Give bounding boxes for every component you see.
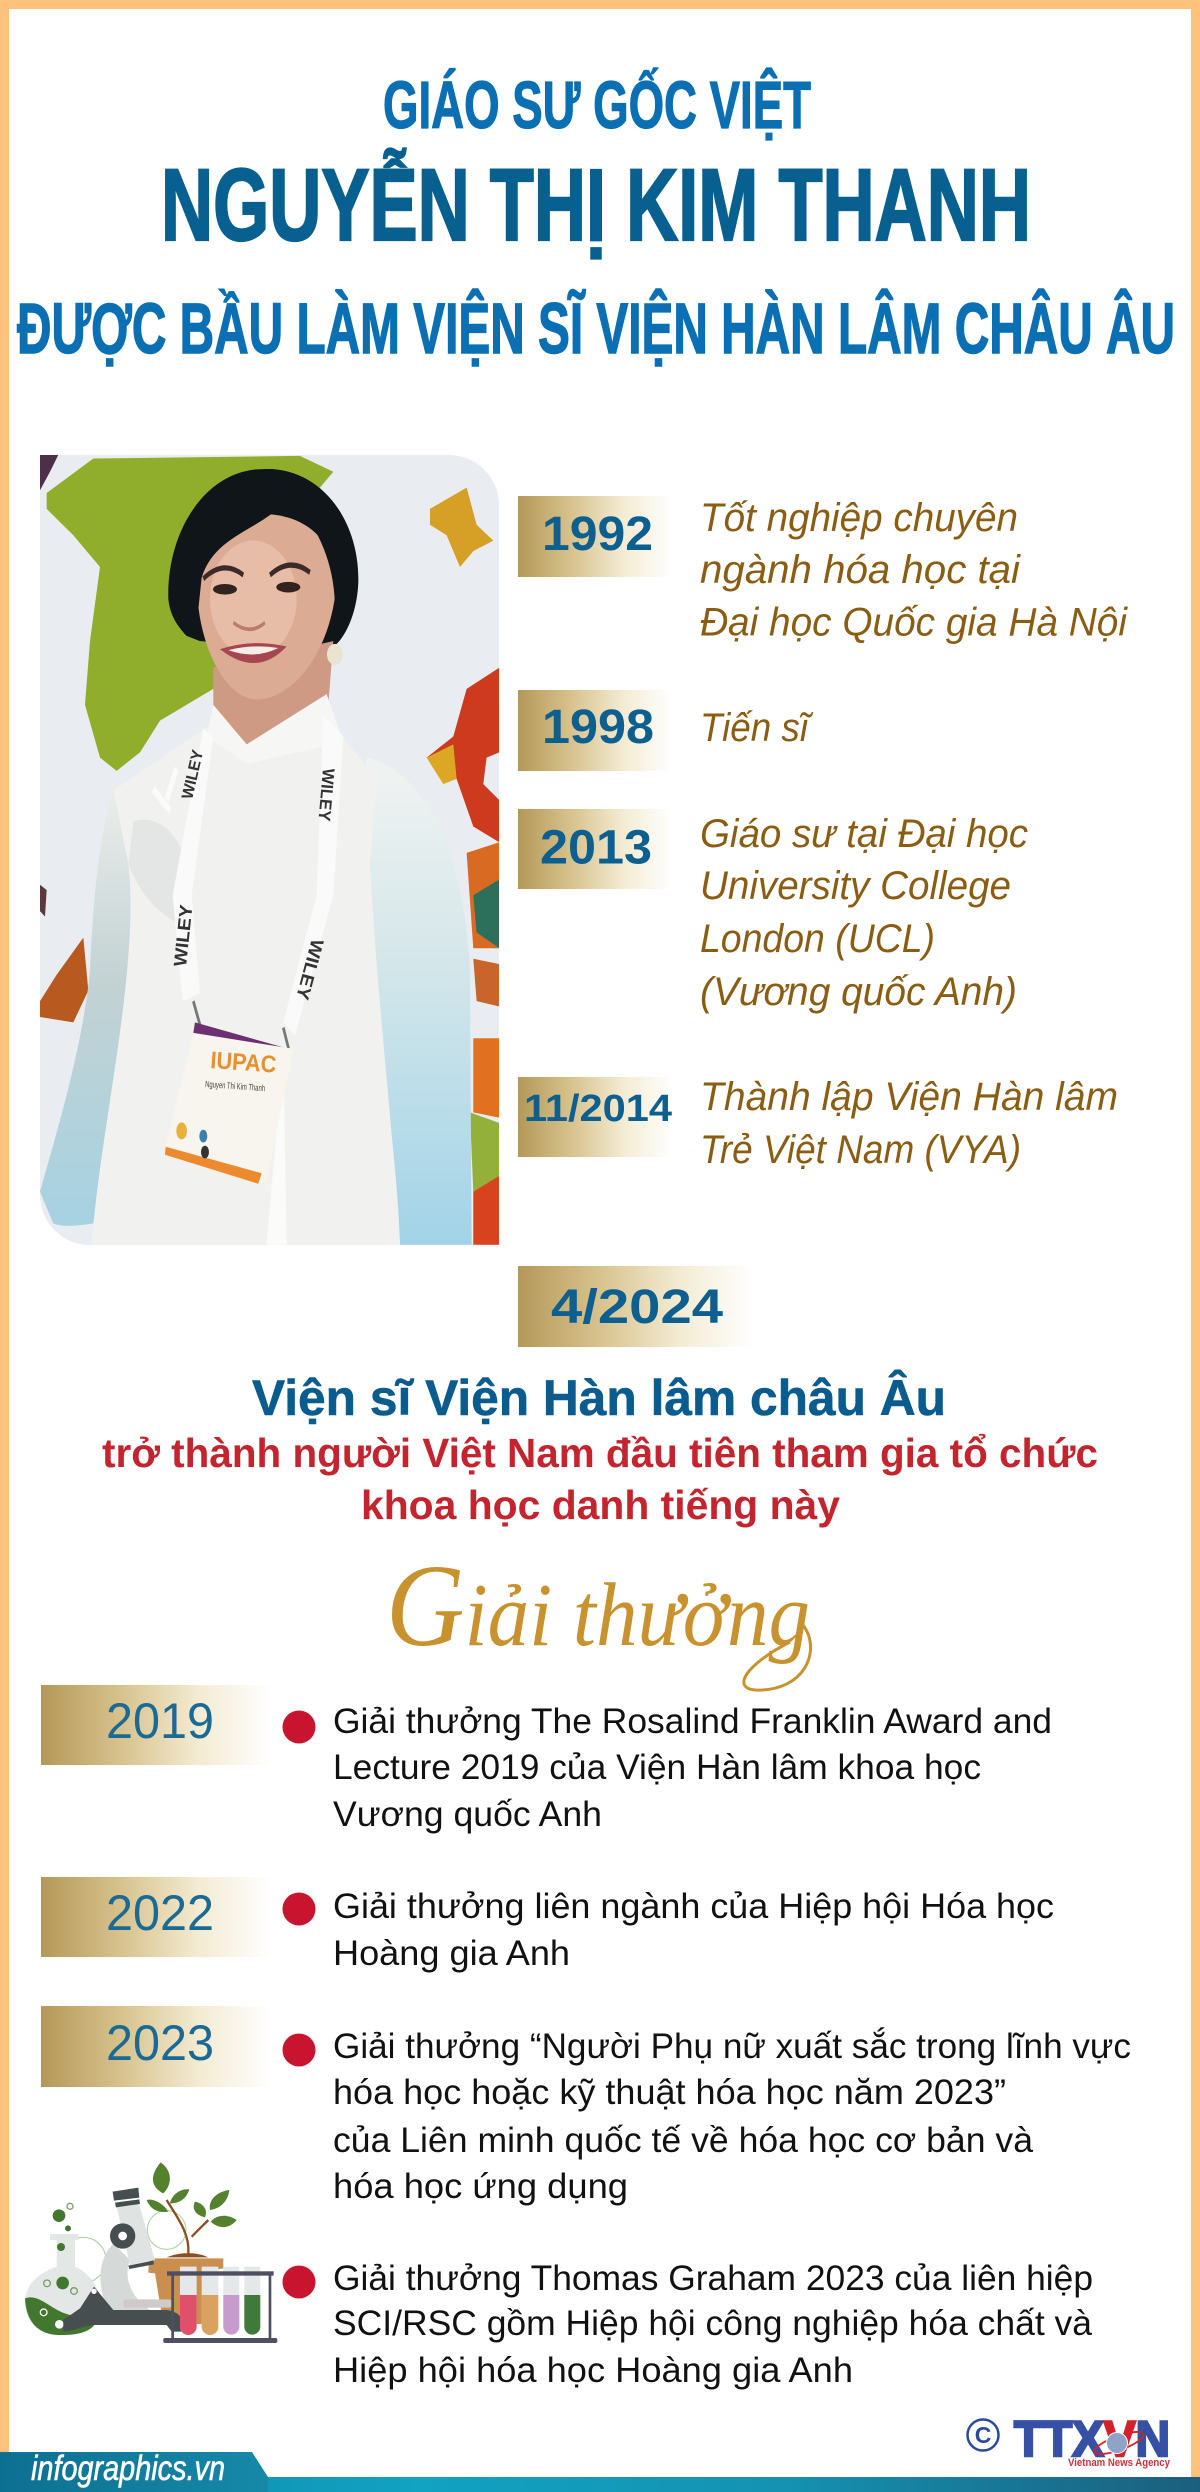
award 2023: 2023 [106,2015,214,2071]
award 2022: Giải thưởng liên ngành của Hiệp hội Hóa học [333,1887,1054,1926]
milestone 1992 text: ngành hóa học tại [700,548,1021,592]
award 2019: 2019 [106,1693,214,1749]
tag 1992: 1992 [542,508,653,561]
lanyard text: WILEY [179,748,207,801]
wordmark: TTXVN [1014,2411,1170,2467]
petri dish behind [147,2211,186,2249]
badge [165,1022,293,1184]
red statement [102,1430,1098,1528]
award 2023: Giải thưởng “Người Phụ nữ xuất sắc trong lĩnh vực [333,2027,1131,2066]
copyright symbol: C [975,2422,991,2448]
tag 1992 [518,496,672,577]
tag 2013 [518,809,672,889]
lanyard text: WILEY [292,937,327,1002]
microscope [63,2188,185,2332]
timeline: career milestones [518,496,1128,1172]
milestone 1992 text: Đại học Quốc gia Hà Nội [700,600,1128,644]
collar [209,694,340,758]
badge text [206,1052,276,1092]
award 2023 [41,2006,1131,2206]
portrait photo [40,455,499,1245]
award Thomas Graham 2023: SCI/RSC gồm Hiệp hội công nghiệp hóa chất và [333,2304,1093,2343]
badge text: IUPAC [210,1047,277,1079]
face [197,514,336,699]
torso [94,799,400,1244]
award Thomas Graham 2023: Hiệp hội hóa học Hoàng gia Anh [333,2351,853,2390]
agency name: Vietnam News Agency [1068,2457,1171,2469]
right sleeve [371,874,472,1245]
milestone 1992 text [700,496,1128,644]
lanyard text: WILEY [170,904,196,967]
award Thomas Graham 2023 [282,2259,1093,2390]
award Thomas Graham 2023: Giải thưởng Thomas Graham 2023 của liên hiệp [333,2259,1093,2298]
award 2023: hóa học hoặc kỹ thuật hóa học năm 2023” [333,2073,1006,2112]
award 2019: Lecture 2019 của Viện Hàn lâm khoa học [333,1748,981,1787]
tag 2013: 2013 [540,822,652,874]
eyes, nose and smile [203,565,310,663]
neck [213,641,333,752]
award 2019: Vương quốc Anh [333,1795,602,1834]
tag 1998 [518,690,672,771]
illustration: laboratory microscope, flask, plant and test tubes [25,2162,277,2343]
plant and pot [147,2162,237,2324]
test tubes and rack [163,2267,277,2343]
tag 1998: 1998 [542,701,654,754]
badge text: Nguyen Thi Kim Thanh [205,1079,265,1093]
tag 11/2014 [518,1077,672,1157]
milestone 1992 text: Tốt nghiệp chuyên [700,496,1018,540]
milestone 2013 text: London (UCL) [700,917,935,961]
copyright symbol [968,2420,998,2450]
milestone 2013 text: University College [700,864,1011,908]
award 2022: 2022 [106,1885,214,1941]
back hair [168,469,358,649]
milestone 11/2014 text: Thành lập Viện Hàn lâm [700,1075,1118,1119]
title [17,67,1175,369]
award 2023: hóa học ứng dụng [333,2167,628,2206]
milestone 11/2014 text [700,1075,1118,1172]
front hair [196,469,336,608]
flask [25,2203,106,2335]
award 2019 [41,1685,1052,1834]
left sleeve [40,808,130,1226]
tag 4/2024: 4/2024 [551,1281,723,1334]
award 2022 [41,1877,1054,1973]
red statement: trở thành người Việt Nam đầu tiên tham gia tổ chức [102,1430,1098,1476]
logo: TTXVN Vietnam News Agency [968,2411,1171,2469]
tag 11/2014: 11/2014 [524,1088,672,1130]
site name: infographics.vn [31,2449,225,2488]
lanyard text [170,748,338,1002]
award 2019: Giải thưởng The Rosalind Franklin Award and [333,1702,1052,1741]
earring [327,644,343,665]
lanyard straps [173,715,343,1054]
milestone 2013 text: (Vương quốc Anh) [700,970,1017,1014]
milestone 2013 text [700,812,1028,1014]
title: GIÁO SƯ GỐC VIỆT [383,67,811,143]
milestone 1998 text: Tiến sĩ [700,706,814,750]
footer band [0,2449,1200,2492]
globe [1092,2428,1146,2458]
award 2023: của Liên minh quốc tế về hóa học cơ bản và [333,2121,1034,2160]
award 2022: Hoàng gia Anh [333,1934,570,1973]
tag 4/2024 [518,1266,754,1347]
red statement: khoa học danh tiếng này [361,1482,840,1528]
lanyard text: WILEY [314,768,338,823]
headline 4/2024: Viện sĩ Viện Hàn lâm châu Âu [252,1370,946,1426]
heading: awards: Giải thưởng [386,1540,810,1671]
milestone 11/2014 text: Trẻ Việt Nam (VYA) [700,1128,1021,1172]
milestone 2013 text: Giáo sư tại Đại học [700,812,1028,856]
